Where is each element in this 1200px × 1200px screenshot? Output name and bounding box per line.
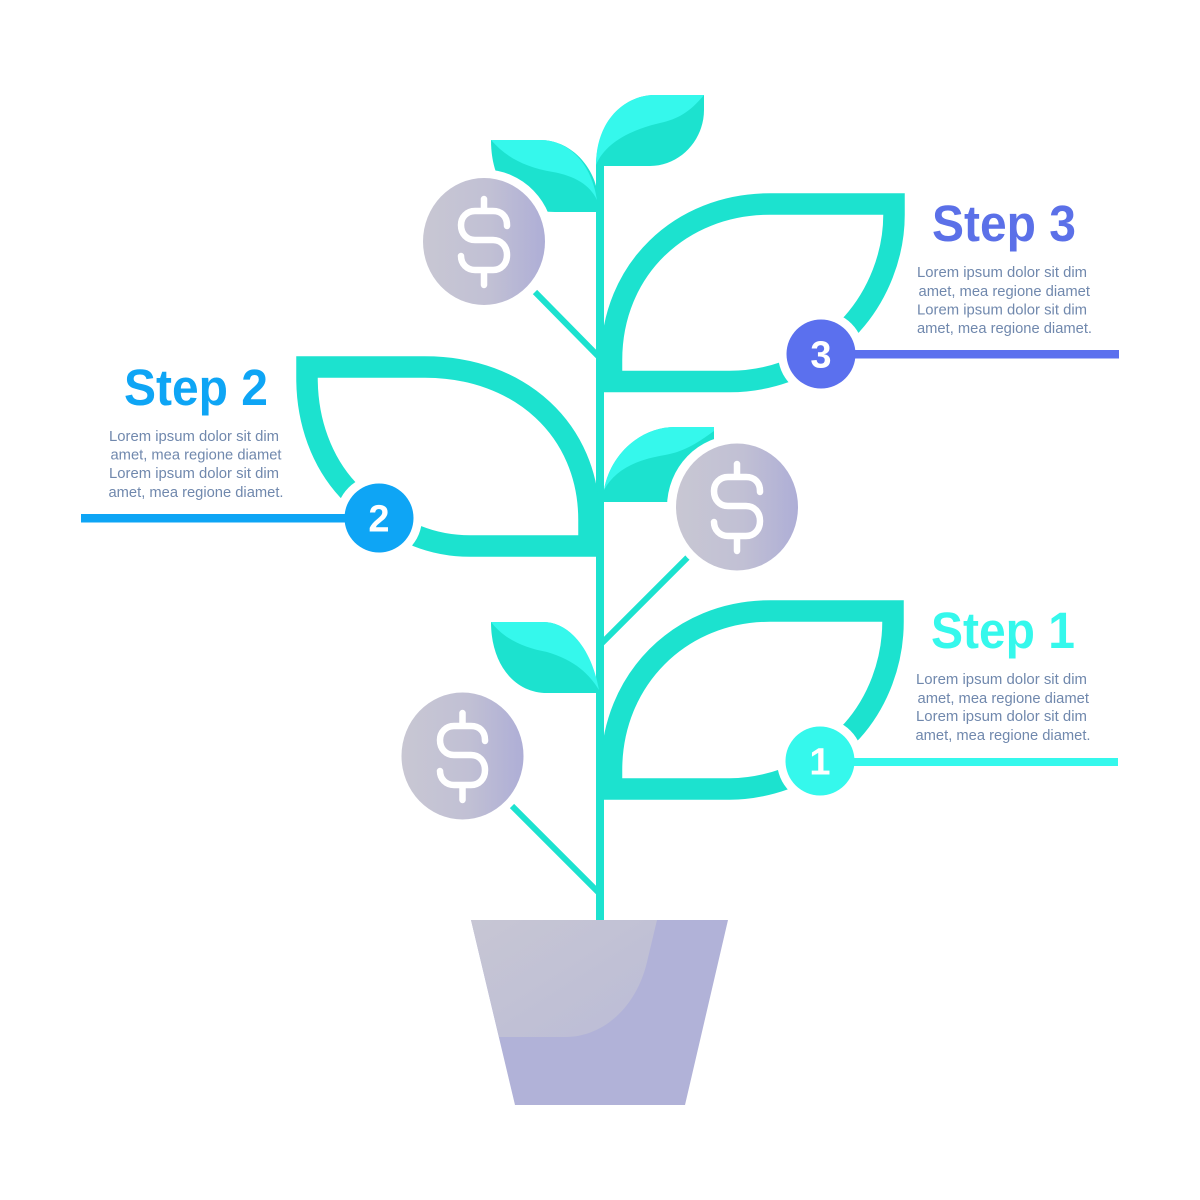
coin top bbox=[414, 170, 554, 314]
text: step 3 bbox=[917, 264, 1092, 337]
badge 1 ring bbox=[777, 718, 863, 804]
text: step 3: amet, mea regione diamet. bbox=[917, 320, 1092, 337]
text: step 2 bbox=[108, 428, 284, 501]
text: step 3: Lorem ipsum dolor sit dim bbox=[917, 302, 1087, 318]
badge 2: 2 bbox=[368, 498, 390, 540]
coin stem: middle bbox=[602, 557, 688, 643]
text: step 1 bbox=[916, 671, 1090, 744]
top leaf right bbox=[596, 95, 704, 167]
badge 2 bbox=[344, 484, 414, 552]
text: step 1: Lorem ipsum dolor sit dim bbox=[916, 671, 1087, 688]
step 3 line bbox=[830, 350, 1119, 358]
badge 2 ring bbox=[336, 475, 422, 561]
coin stem: top bbox=[535, 292, 598, 356]
coin middle bbox=[667, 435, 807, 579]
lower leaf bbox=[491, 622, 599, 693]
leaf outline: step 3 bbox=[600, 204, 894, 382]
coin bottom bbox=[402, 692, 524, 820]
top leaf left bbox=[491, 140, 597, 212]
coin stem: bottom bbox=[512, 806, 598, 892]
text: step 2: amet, mea regione diamet. bbox=[108, 484, 284, 501]
step 2 line bbox=[81, 514, 361, 522]
badge 3 ring bbox=[778, 311, 864, 397]
pot bbox=[471, 920, 728, 1105]
badge 1 bbox=[786, 726, 854, 796]
heading: step 3: Step 3 bbox=[932, 195, 1076, 252]
text: step 1: amet, mea regione diamet bbox=[918, 690, 1090, 707]
text: step 2: Lorem ipsum dolor sit dim bbox=[109, 428, 279, 445]
heading: step 1: Step 1 bbox=[931, 602, 1075, 659]
leaf outline: step 2 bbox=[307, 367, 600, 546]
step 1 line bbox=[830, 758, 1118, 766]
middle leaf bbox=[604, 427, 714, 502]
leaf outline: step 1 bbox=[600, 611, 893, 789]
text: step 1: Lorem ipsum dolor sit dim bbox=[916, 708, 1087, 725]
text: step 2: Lorem ipsum dolor sit dim bbox=[109, 465, 279, 482]
plant stem bbox=[596, 160, 604, 922]
text: step 3: Lorem ipsum dolor sit dim bbox=[917, 264, 1087, 281]
badge 1: 1 bbox=[809, 742, 831, 784]
text: step 3: amet, mea regione diamet bbox=[918, 283, 1091, 300]
heading: step 2: Step 2 bbox=[124, 359, 268, 416]
badge 3: 3 bbox=[810, 334, 832, 376]
text: step 1: amet, mea regione diamet. bbox=[916, 727, 1090, 744]
badge 3 bbox=[786, 320, 856, 388]
text: step 2: amet, mea regione diamet bbox=[110, 446, 282, 464]
